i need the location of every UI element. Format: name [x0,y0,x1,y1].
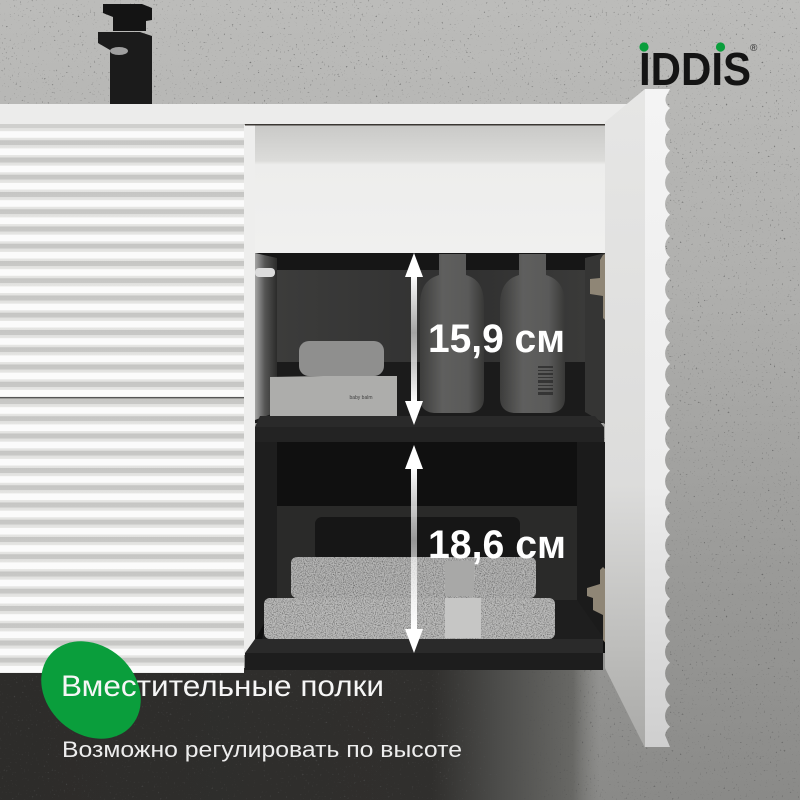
cabinet top shadow line [245,124,606,126]
bottle barcode [538,366,553,395]
small round jar [299,341,384,376]
middle towel band [445,561,474,596]
green blob [21,621,161,759]
upper hinge [590,253,607,322]
arrow: upper shelf height [405,253,423,425]
white box [270,376,397,417]
middle grey towel [291,557,536,598]
cabinet left white edge [244,125,255,655]
panel: cabinet upper white panel [244,125,606,253]
label: upper height: 15,9 см [428,317,565,361]
upper shelf board [255,416,604,442]
bottle one [420,254,484,413]
lower grey towel [264,598,555,639]
panel: upper shelf compartment [255,253,607,424]
subheading: Возможно регулировать по высоте [62,737,462,762]
label: lower height: 18,6 см [428,523,566,567]
panel: lower shelf compartment [255,442,605,653]
panel: door scalloped edge [645,89,670,747]
logo: IDDIS: IDDIS [639,43,751,95]
icon: black faucet [98,4,152,104]
lower shelf board [245,639,603,670]
floor shadow band [0,668,600,800]
white box: baby balm [349,395,373,401]
panel: ribbed drawers [0,124,244,673]
vanity countertop [0,104,650,124]
arrow: lower shelf height [405,445,423,653]
lower towel band [445,598,481,638]
black towel [315,517,520,561]
plug peg [255,268,275,277]
lower hinge [587,567,607,645]
bottle two [500,254,565,413]
logo: IDDIS: ® [750,43,758,54]
panel: door inner face [605,89,645,748]
heading: Вместительные полки [61,670,384,703]
